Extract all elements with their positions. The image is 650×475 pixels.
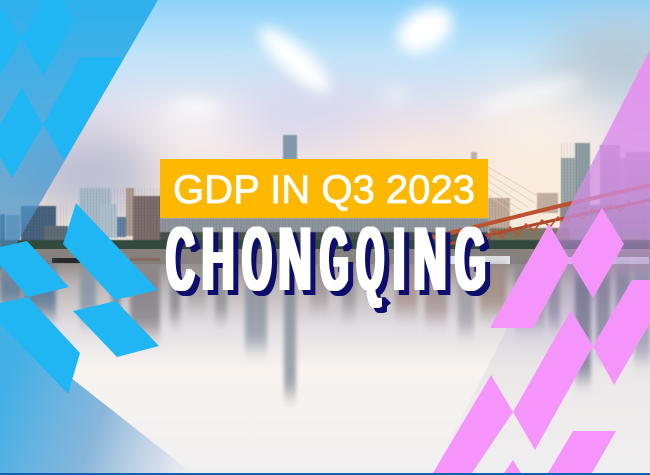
- title shadow: N: [418, 214, 451, 315]
- ships: [52, 258, 80, 263]
- title shadow: [171, 212, 491, 315]
- title shadow: H: [207, 214, 239, 315]
- title letters: N: [414, 209, 446, 310]
- riverside bank: [0, 240, 650, 250]
- icon: blue parallelograms lower left: [0, 203, 159, 394]
- title shadow: C: [171, 213, 199, 314]
- title letters: C: [166, 208, 194, 309]
- title shadow: I: [398, 213, 410, 315]
- bridge: [430, 185, 650, 246]
- title letters: N: [278, 209, 311, 310]
- bottom stripe: [0, 473, 650, 475]
- title shadow: G: [460, 213, 491, 314]
- title shadow: G: [325, 212, 353, 315]
- water with reflection: [0, 264, 650, 473]
- title shadow: N: [284, 214, 316, 315]
- title: Chongqing: [166, 207, 491, 315]
- window texture: [0, 143, 650, 255]
- title letters: O: [242, 208, 272, 310]
- title letters: Q: [356, 208, 384, 310]
- towers: [0, 135, 650, 255]
- clouds: [169, 0, 585, 117]
- title letters: G: [320, 207, 348, 310]
- city skyline: [0, 135, 650, 268]
- panel: translucent pink triangle right: [433, 50, 650, 473]
- cable stays: [488, 167, 541, 214]
- heading banner: [160, 159, 488, 218]
- icon: pink diamonds right: [433, 208, 650, 473]
- icon: blue diamonds top left: [0, 0, 124, 178]
- heading banner: GDP IN Q3 2023: [173, 168, 475, 212]
- title letters: [166, 207, 486, 310]
- title letters: G: [455, 208, 486, 309]
- title letters: H: [202, 209, 234, 310]
- title shadow: Q: [362, 213, 389, 315]
- title letters: I: [393, 208, 405, 310]
- panel: translucent blue triangle bottom left: [0, 322, 192, 473]
- background photo: sky: [0, 0, 650, 265]
- panel: translucent blue triangle top left: [0, 0, 158, 272]
- title shadow: O: [247, 213, 277, 315]
